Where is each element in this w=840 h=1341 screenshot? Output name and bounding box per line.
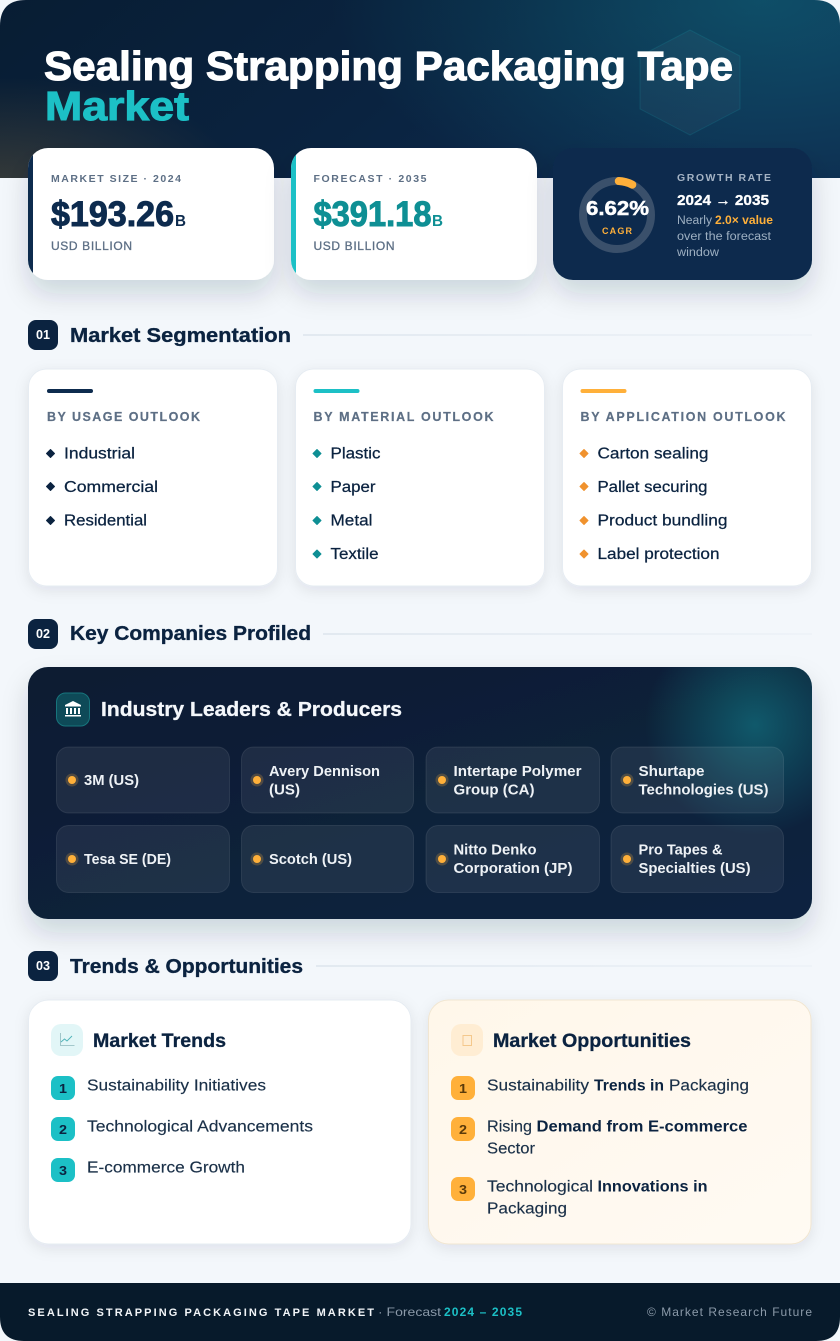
- panel: by application outlook: BY APPLICATION OUTLOOK: [580, 410, 786, 424]
- growth rate text: GROWTH RATE: [677, 172, 771, 184]
- footer: SEALING STRAPPING PACKAGING TAPE MARKET: [28, 1307, 374, 1319]
- trend 2: 2: [59, 1122, 67, 1137]
- company chip: Intertape Polymer: Intertape Polymer: [454, 764, 582, 780]
- list: usage segments: Residential: [64, 512, 147, 530]
- list: usage segments: Commercial: [64, 479, 158, 496]
- growth rate text: 2.0× value: [715, 215, 773, 227]
- panel: key companies: [28, 667, 812, 919]
- opportunity 1: Packaging: [669, 1078, 749, 1094]
- company chip: Nitto Denko: [426, 826, 600, 892]
- list: application segments: Pallet securing: [598, 479, 708, 496]
- opportunity 3: Technological: [487, 1178, 593, 1196]
- panel: by usage outlook: [28, 369, 278, 586]
- panel heading: Market Trends: [93, 1031, 226, 1052]
- panel heading: Market Opportunities: [493, 1031, 691, 1052]
- stat card: market size 2024: B: [175, 213, 186, 230]
- section heading 01: [28, 320, 812, 350]
- trend 2: [51, 1117, 313, 1141]
- icon: missing glyph box: [451, 1024, 483, 1056]
- stat card: market size 2024: MARKET SIZE · 2024: [51, 173, 181, 185]
- opportunity 1: Sustainability: [487, 1078, 589, 1094]
- opportunity 1: 1: [459, 1081, 467, 1096]
- panel: market trends: [28, 1000, 411, 1244]
- company chip: Intertape Polymer: [426, 747, 600, 813]
- section heading 03: Trends & Opportunities: [70, 955, 303, 978]
- list: application segments: Product bundling: [598, 512, 728, 530]
- trend 2: Technological Advancements: [87, 1118, 313, 1136]
- trend 3: 3: [59, 1163, 67, 1178]
- opportunity 2: Demand from E-commerce: [536, 1118, 748, 1136]
- panel heading: Industry Leaders & Producers: [101, 698, 402, 721]
- section heading 01: Market Segmentation: [70, 324, 291, 347]
- CAGR ring gauge: [581, 179, 653, 251]
- growth rate text: over the forecast: [677, 231, 772, 243]
- section heading 03: 03: [36, 958, 50, 973]
- footer: © Market Research Future: [647, 1305, 812, 1319]
- section heading 02: [28, 619, 812, 649]
- panel: market opportunities: [428, 1000, 811, 1244]
- section heading 01: 01: [36, 327, 50, 342]
- opportunity 3: Innovations in: [598, 1178, 708, 1196]
- panel: by material outlook: [296, 369, 544, 586]
- company chip: Intertape Polymer: Group (CA): [454, 782, 535, 798]
- opportunity 2: Rising: [487, 1118, 532, 1136]
- list: application segments: Label protection: [598, 546, 720, 563]
- company chip: Shurtape: Shurtape: [638, 764, 704, 780]
- stat card: CAGR growth rate: [553, 148, 812, 280]
- growth rate text: Nearly: [677, 215, 712, 227]
- list: material segments: Textile: [330, 546, 378, 563]
- company chip: Tesa SE: Tesa SE (DE): [84, 852, 171, 868]
- company chip: Shurtape: [611, 747, 784, 813]
- company chip: Avery Dennison: Avery Dennison: [269, 764, 380, 780]
- opportunity 2: [451, 1117, 748, 1158]
- list: material segments: [313, 446, 381, 563]
- title: [44, 43, 733, 129]
- section heading 02: 02: [36, 626, 50, 641]
- opportunity 3: [451, 1177, 708, 1218]
- footer: · Forecast: [378, 1305, 442, 1319]
- opportunity 2: 2: [459, 1122, 467, 1137]
- list: material segments: Metal: [330, 512, 372, 530]
- stat card: forecast 2035: USD BILLION: [314, 239, 394, 253]
- footer: 2024 – 2035: [444, 1305, 522, 1319]
- header banner: [0, 0, 840, 178]
- CAGR ring gauge: CAGR: [602, 226, 632, 236]
- stat card: forecast 2035: [291, 148, 537, 280]
- panel: by material outlook: BY MATERIAL OUTLOOK: [314, 410, 494, 424]
- trend 1: Sustainability Initiatives: [87, 1078, 266, 1094]
- list: material segments: Plastic: [330, 446, 381, 462]
- company chip: Avery Dennison: (US): [269, 782, 300, 798]
- company chip: Pro Tapes: Specialties (US): [638, 861, 751, 877]
- panel: by application outlook: [562, 369, 812, 586]
- trend 3: E-commerce Growth: [87, 1160, 245, 1176]
- section heading 03: [28, 951, 812, 981]
- title: Sealing Strapping Packaging Tape: [44, 43, 733, 89]
- opportunity 2: Sector: [487, 1140, 535, 1158]
- trend 1: 1: [59, 1081, 67, 1096]
- list: application segments: [580, 446, 728, 563]
- company chip: 3M: [56, 747, 230, 813]
- company chip: Scotch: Scotch (US): [269, 852, 352, 868]
- stat card: forecast 2035: FORECAST · 2035: [314, 173, 427, 185]
- opportunity 1: [451, 1076, 749, 1100]
- company chip: Scotch: [242, 826, 414, 892]
- title: Market: [45, 83, 189, 129]
- company chip: Tesa SE: [56, 826, 230, 892]
- list: application segments: Carton sealing: [598, 446, 708, 462]
- CAGR ring gauge: 6.62%: [586, 198, 649, 220]
- stat card: market size 2024: USD BILLION: [51, 239, 132, 253]
- growth rate text: [676, 172, 773, 259]
- list: usage segments: [46, 446, 158, 530]
- stat card: forecast 2035: B: [432, 213, 443, 230]
- company chip: Pro Tapes: [611, 826, 784, 892]
- company chip: Shurtape: Technologies (US): [638, 782, 769, 798]
- opportunity 1: Trends in: [594, 1078, 664, 1094]
- trend 1: [51, 1076, 266, 1100]
- opportunity 3: 3: [459, 1182, 467, 1197]
- company chip: Nitto Denko: Nitto Denko: [454, 842, 537, 858]
- list: usage segments: Industrial: [64, 446, 135, 462]
- list: material segments: Paper: [330, 479, 376, 496]
- company chip: Pro Tapes: Pro Tapes &: [638, 842, 723, 858]
- section heading 02: Key Companies Profiled: [70, 622, 311, 645]
- stat card: market size 2024: $193.26: [51, 195, 174, 234]
- company chip: Nitto Denko: Corporation (JP): [454, 861, 573, 877]
- opportunity 3: Packaging: [487, 1200, 567, 1218]
- company chip: Avery Dennison: [242, 747, 414, 813]
- stat card: market size 2024: [28, 148, 274, 280]
- panel: by usage outlook: BY USAGE OUTLOOK: [47, 410, 200, 424]
- company chip: 3M: 3M (US): [84, 773, 139, 789]
- trend 3: [51, 1158, 245, 1182]
- footer: [0, 1283, 840, 1341]
- stat card: forecast 2035: $391.18: [314, 195, 432, 234]
- icon: bank building: [56, 693, 90, 726]
- growth rate text: window: [676, 247, 720, 259]
- icon: line chart: [51, 1024, 83, 1056]
- growth rate text: 2024 → 2035: [677, 192, 769, 209]
